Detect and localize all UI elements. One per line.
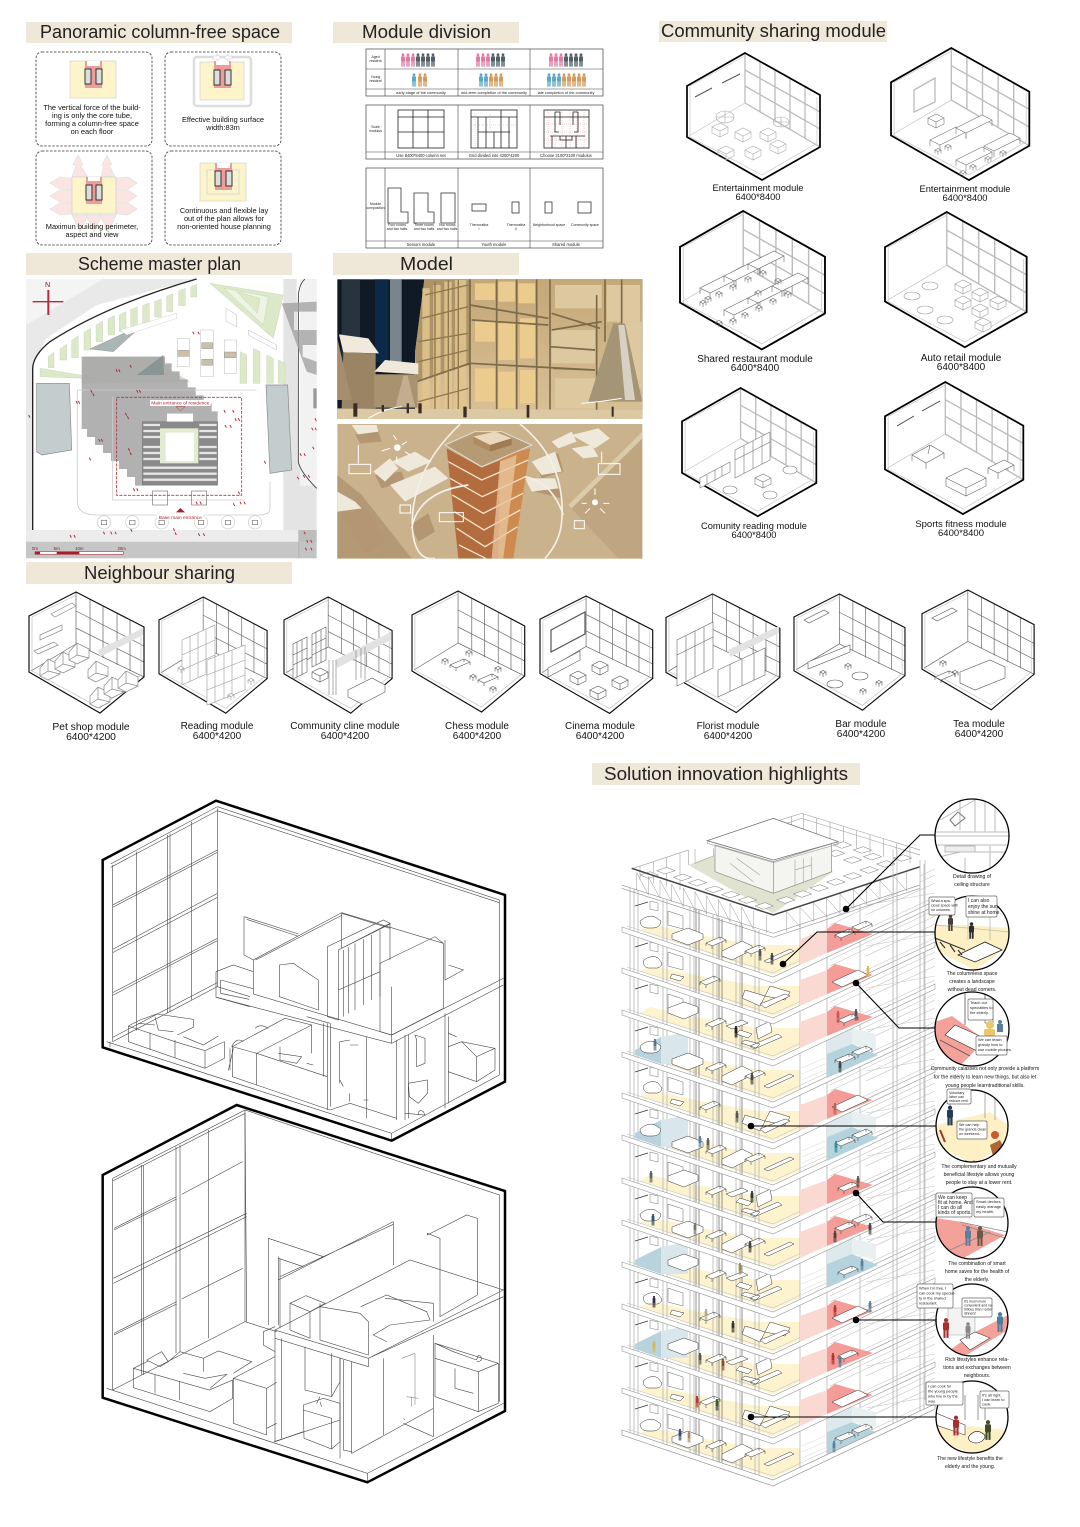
callout: community classes xyxy=(931,992,1039,1089)
site plan: Base main entrance xyxy=(159,515,202,521)
module: tea: 6400*4200 xyxy=(955,729,1004,740)
callout: rich lifestyles xyxy=(917,1284,1011,1379)
callout: mutual lifestyle: the grands clean xyxy=(959,1128,986,1132)
callout: mutual lifestyle: on weekend. xyxy=(959,1132,980,1136)
table: resident phases: resident xyxy=(369,59,382,63)
table: scale modulus: Scale xyxy=(371,125,380,129)
callout: smart home: my health. xyxy=(976,1209,994,1214)
callout: rich lifestyles: It's much more xyxy=(964,1300,986,1304)
panel: effective surface: width:83m xyxy=(205,123,240,132)
callout: smart home xyxy=(936,1187,1010,1283)
table: module composition: Shared module xyxy=(552,242,581,247)
callout: smart home: Smart devices xyxy=(976,1199,1001,1204)
callout: rich lifestyles: convenient and nu- xyxy=(964,1304,993,1308)
module: entertainment classroom xyxy=(891,48,1029,203)
callout: new lifestyle: cook. xyxy=(982,1402,991,1406)
rooftop xyxy=(622,813,920,937)
site plan: Main entrance of residence xyxy=(151,401,210,407)
callout: mutual lifestyle: beneficial lifestyle allows young xyxy=(944,1172,1015,1178)
module: auto retail: Auto retail module xyxy=(921,353,1002,364)
panel: vertical force: ing is only the core tube, xyxy=(52,111,132,120)
panel: maximum perimeter: aspect and view xyxy=(66,230,119,239)
panel: flexible layout: Continuous and flexible lay xyxy=(180,206,268,215)
module: community clinic: Community cline module xyxy=(290,721,400,732)
heading: Neighbour sharing xyxy=(26,562,292,584)
module: shared restaurant: Shared restaurant module xyxy=(697,354,813,365)
photo: aerial tower model xyxy=(337,424,642,559)
table: module composition: Four rooms xyxy=(388,223,406,227)
module: bar: 6400*4200 xyxy=(837,729,886,740)
module: community reading: 6400*8400 xyxy=(732,530,776,540)
callout: rich lifestyles: Rich lifestyles enhance rela- xyxy=(945,1357,1009,1363)
callout: community classes: Teach our xyxy=(970,1000,988,1005)
module: entertainment lounge xyxy=(687,53,820,202)
callout: community classes: use mobile xyxy=(978,1047,997,1052)
heading: Model xyxy=(333,253,519,275)
panel: flexible layout: out of the plan allows for xyxy=(184,214,265,223)
callout: columnless space: shine at home. xyxy=(968,910,1001,916)
module: entertainment lounge: Entertainment module xyxy=(713,183,803,193)
module: auto retail xyxy=(885,212,1027,373)
callout: smart home: kinds of sports. xyxy=(938,1210,972,1216)
callout: columnless space: creates a landscape xyxy=(949,979,995,985)
table: module composition: and two halls xyxy=(437,227,457,231)
callout: columnless space xyxy=(929,896,1010,993)
site plan: 0m xyxy=(32,546,38,551)
panel: vertical force: The vertical force of the build- xyxy=(43,103,141,112)
callout: columnless space: The columnless space xyxy=(947,971,998,977)
table: module composition: Thermostha xyxy=(507,223,525,227)
callout: new lifestyle: who live in by the xyxy=(928,1394,958,1398)
callout: community classes: grandy how to xyxy=(978,1042,1002,1047)
table: resident phases: mid-term completion of the community xyxy=(461,90,527,95)
table: module composition: Module xyxy=(370,202,381,206)
table: resident phases: early stage of the community xyxy=(396,90,446,95)
module: entertainment classroom: Entertainment module xyxy=(920,184,1010,194)
heading: Module division: Module division xyxy=(362,21,491,42)
large unit axonometric: lower xyxy=(103,1105,505,1482)
table: module composition: Neighborhood space xyxy=(533,223,565,227)
callout: ceiling detail xyxy=(935,799,1010,888)
callout: mutual lifestyle: labor can xyxy=(949,1095,964,1099)
right facade grid xyxy=(893,850,925,1410)
module: pet shop: 6400*4200 xyxy=(66,732,116,743)
callout: community classes: specialties to xyxy=(970,1005,992,1010)
module: chess: Chess module xyxy=(445,721,509,732)
table: scale modulus: Choose 2100*2100 modulus xyxy=(540,153,592,158)
module: sports fitness xyxy=(885,382,1023,539)
table: module composition: I xyxy=(479,227,480,231)
module: cinema: Cinema module xyxy=(565,721,635,732)
callout: mutual lifestyle: We can help xyxy=(959,1123,979,1127)
callout: smart home: easily manage xyxy=(976,1204,1001,1209)
callout: columnless space: cious space with xyxy=(931,904,958,908)
heading: Scheme master plan: Scheme master plan xyxy=(78,253,241,274)
callout: mutual lifestyle xyxy=(936,1089,1017,1186)
table: module composition: Youth module xyxy=(482,242,507,247)
typical floors stacked xyxy=(622,859,935,1444)
module: bar: Bar module xyxy=(835,719,887,730)
callout: new lifestyle: the young people xyxy=(928,1388,958,1394)
callout: smart home: We can keep xyxy=(938,1195,967,1201)
table: module composition xyxy=(366,168,603,248)
panel: effective surface xyxy=(165,52,281,146)
panel: maximum perimeter: Maximun building perimeter, xyxy=(46,222,138,231)
callout: new lifestyle: I can cook for xyxy=(928,1384,952,1388)
table: module composition: Community space xyxy=(571,223,599,227)
module: pet shop xyxy=(29,592,144,743)
heading: Scheme master plan xyxy=(26,253,292,275)
panel: vertical force: forming a column-free space xyxy=(45,119,139,128)
callout: smart home: The combination of smart xyxy=(948,1261,1006,1267)
callout: rich lifestyles: ty in the shared xyxy=(919,1296,946,1300)
table: module composition: Seniors module xyxy=(407,242,436,247)
callout: rich lifestyles: dinners! xyxy=(964,1312,976,1316)
table: module composition: and two halls xyxy=(387,227,407,231)
panel: effective surface: Effective building surface xyxy=(182,115,264,124)
callout: rich lifestyles: tions and exchanges between xyxy=(943,1365,1011,1371)
callout: new lifestyle: way. xyxy=(928,1398,936,1404)
callout: community classes: phones. xyxy=(998,1047,1012,1052)
module: florist: 6400*4200 xyxy=(704,731,753,742)
callout: mutual lifestyle: Voluntary xyxy=(949,1091,965,1095)
callout: smart home: fit at home. And xyxy=(938,1200,973,1206)
callout: new lifestyle: The new lifestyle benefits the xyxy=(937,1456,1003,1462)
table: resident phases xyxy=(366,49,603,96)
residents on the floors xyxy=(650,949,871,1452)
callout: rich lifestyles: When I'm free, I xyxy=(919,1286,946,1290)
callout: rich lifestyles: neighbours. xyxy=(964,1373,990,1379)
table: module composition: Thermostha xyxy=(470,223,488,227)
module: chess xyxy=(412,591,525,742)
callout: smart home: the elderly. xyxy=(965,1277,989,1283)
callout: rich lifestyles: can cook my special- xyxy=(919,1290,956,1296)
callout: community classes: We can teach xyxy=(978,1037,1002,1042)
table: resident phases: resident xyxy=(369,79,382,83)
module: community reading: Comunity reading module xyxy=(701,521,807,531)
module: cinema xyxy=(540,596,653,742)
callout: smart home: I can do all xyxy=(938,1205,962,1211)
table: module composition: and two halls xyxy=(414,227,434,231)
site plan: 10m xyxy=(75,546,84,551)
module: shared restaurant: 6400*8400 xyxy=(731,363,780,374)
module: bar xyxy=(794,594,905,740)
panel: flexible layout xyxy=(165,151,281,245)
callout: community classes: the elderly. xyxy=(970,1010,989,1015)
module: community clinic: 6400*4200 xyxy=(321,731,370,742)
site plan xyxy=(26,279,317,558)
leader lines xyxy=(748,835,936,1420)
bottom floor xyxy=(622,1362,935,1486)
module: entertainment classroom: 6400*8400 xyxy=(943,193,987,203)
photo: street view model xyxy=(337,279,642,419)
callout: columnless space: enjoy the sun- xyxy=(968,904,1000,910)
module: florist xyxy=(666,594,780,742)
table: resident phases: Aged xyxy=(372,55,380,59)
callout: new lifestyle: It's all right. xyxy=(982,1392,1002,1398)
table: module composition: composition xyxy=(366,206,385,210)
module: tea xyxy=(922,590,1034,740)
callout: smart home: home saves for the health of xyxy=(945,1269,1010,1275)
callout: columnless space: What a spa- xyxy=(931,899,952,903)
callout: columnless space: no columns. xyxy=(931,908,951,912)
callout: ceiling detail: Detail drawing of xyxy=(953,874,992,880)
table: module composition: Two rooms xyxy=(438,223,456,227)
heading: Model: Model xyxy=(400,253,453,274)
module: shared restaurant xyxy=(680,211,825,374)
callout: mutual lifestyle: The complementary and mutually xyxy=(941,1164,1017,1170)
callout: community classes: young people learntraditional skills. xyxy=(945,1083,1025,1089)
module: community clinic xyxy=(284,597,400,742)
table: scale modulus: modulus xyxy=(369,129,382,133)
callout: mutual lifestyle: reduce rent. xyxy=(949,1099,969,1103)
building axonometric xyxy=(622,813,935,1486)
module: entertainment lounge: 6400*8400 xyxy=(736,192,780,202)
callout: new lifestyle xyxy=(926,1381,1009,1470)
module: reading: Reading module xyxy=(181,721,254,732)
table: scale modulus xyxy=(366,105,603,159)
callout: new lifestyle: elderly and the young. xyxy=(945,1464,995,1470)
heading: Community sharing module: Community sharing module xyxy=(661,20,886,41)
site plan: N xyxy=(45,280,50,289)
callout: columnless space: without dead corners. xyxy=(948,987,996,993)
callout: ceiling detail: ceiling structure xyxy=(954,882,990,888)
table: resident phases: Young xyxy=(371,75,380,79)
panel: flexible layout: non-oriented house planning xyxy=(177,222,271,231)
site plan: 5m xyxy=(54,546,60,551)
callout: rich lifestyles: tritious than I order xyxy=(964,1308,993,1312)
heading: Solution innovation highlights: Solution innovation highlights xyxy=(604,763,848,784)
module: sports fitness: 6400*8400 xyxy=(938,528,984,539)
module: sports fitness: Sports fitness module xyxy=(915,519,1007,530)
heading: Panoramic column-free space: Panoramic column-free space xyxy=(40,21,280,42)
module: community reading xyxy=(682,388,816,540)
callout: rich lifestyles: restaurant. xyxy=(919,1300,938,1306)
table: scale modulus: Grid divided into 4200*4200 xyxy=(469,153,520,158)
heading: Module division xyxy=(333,21,519,43)
table: scale modulus: Use 8400*8400 column net xyxy=(396,153,447,158)
heading: Neighbour sharing: Neighbour sharing xyxy=(84,562,235,583)
module: reading: 6400*4200 xyxy=(193,731,242,742)
callout: columnless space: I can also xyxy=(968,898,990,904)
panel: vertical force xyxy=(36,52,152,146)
module: auto retail: 6400*8400 xyxy=(937,362,986,373)
table: module composition: II xyxy=(515,227,517,231)
panel: maximum perimeter xyxy=(36,151,152,245)
module: pet shop: Pet shop module xyxy=(52,722,130,733)
callout: mutual lifestyle: people to stay at a lower rent. xyxy=(946,1180,1012,1186)
large unit axonometric: upper xyxy=(103,801,505,1141)
module: chess: 6400*4200 xyxy=(453,731,502,742)
module: florist: Florist module xyxy=(697,721,760,732)
callout: community classes: for the elderly to learn new things, but also let xyxy=(934,1074,1037,1080)
table: resident phases: late completion of the community xyxy=(538,90,594,95)
module: tea: Tea module xyxy=(953,719,1005,730)
callout: new lifestyle: I can learn to xyxy=(982,1397,1004,1402)
panel: vertical force: on each floor xyxy=(71,127,114,136)
site plan: 20m xyxy=(117,546,126,551)
table: module composition: Three rooms xyxy=(414,223,434,227)
module: cinema: 6400*4200 xyxy=(576,731,625,742)
module: reading xyxy=(159,597,267,742)
callout: community classes: Community calasses not only provide a platform xyxy=(931,1066,1039,1072)
